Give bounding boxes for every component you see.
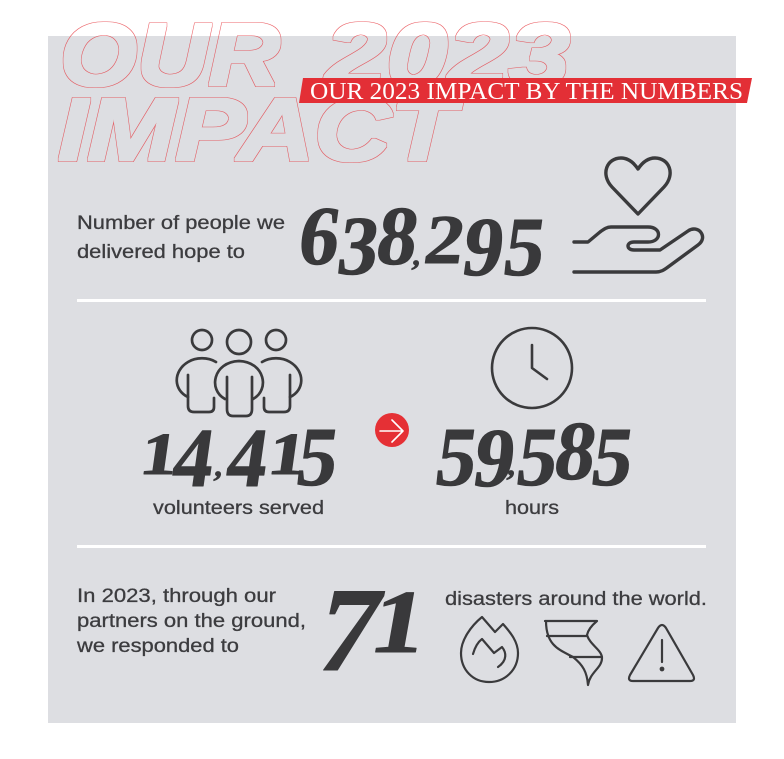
number: 14,415: , xyxy=(213,449,225,483)
text: disasters lead-in xyxy=(76,585,306,657)
icon: red arrow xyxy=(375,413,409,447)
text: disasters lead-in: we responded to xyxy=(76,635,239,657)
number: 638,295: 2 xyxy=(420,201,470,279)
text: disasters around the world: disasters around the world. xyxy=(445,588,707,610)
text: volunteers served: volunteers served xyxy=(153,497,324,519)
icon: flame xyxy=(461,617,518,682)
number: 59,585: 8 xyxy=(549,405,602,497)
number: 59,585 xyxy=(430,405,639,504)
number: 638,295 xyxy=(293,190,551,293)
number: 71: 1 xyxy=(364,572,435,672)
number: 14,415: 5 xyxy=(291,411,344,503)
number: 59,585: 5 xyxy=(430,411,483,503)
text: people description xyxy=(77,212,285,263)
panel: grey background xyxy=(48,36,736,723)
divider xyxy=(77,545,706,548)
text: disasters lead-in: In 2023, through our xyxy=(77,585,277,607)
text: hours: hours xyxy=(505,497,559,519)
number: 59,585: 5 xyxy=(511,411,564,503)
number: 14,415: 1 xyxy=(136,420,183,487)
title: outlined OUR 2023 IMPACT: 2023 xyxy=(322,5,570,104)
icon: clock xyxy=(492,328,572,408)
number: 638,295: 3 xyxy=(332,200,385,292)
number: 638,295: 9 xyxy=(457,201,510,293)
heading banner: OUR 2023 IMPACT BY THE NUMBERS xyxy=(310,78,743,105)
number: 14,415: 1 xyxy=(264,420,311,487)
text: disasters lead-in: partners on the ground, xyxy=(77,610,306,632)
divider xyxy=(77,299,706,302)
number: 59,585: , xyxy=(506,448,518,482)
number: 71: 7 xyxy=(305,564,393,697)
number: 14,415: 4 xyxy=(167,412,220,504)
number: 59,585: 5 xyxy=(586,411,639,503)
title: outlined OUR 2023 IMPACT xyxy=(58,5,570,179)
number: 14,415 xyxy=(136,411,344,504)
number: 638,295: 6 xyxy=(293,190,346,282)
number: 71 xyxy=(305,564,435,697)
number: 638,295: 8 xyxy=(371,190,424,282)
icon: heart in hand xyxy=(574,158,703,272)
title: outlined OUR 2023 IMPACT: IMPACT xyxy=(58,80,462,179)
number: 59,585: 9 xyxy=(468,412,521,504)
number: 638,295: 5 xyxy=(498,201,551,293)
number: 638,295: , xyxy=(411,238,423,272)
number: 14,415: 4 xyxy=(221,412,274,504)
icon: tornado xyxy=(545,621,602,685)
text: people description: Number of people we xyxy=(77,212,285,234)
title: outlined OUR 2023 IMPACT: OUR xyxy=(60,5,280,104)
text: people description: delivered hope to xyxy=(77,241,245,263)
icon: warning triangle xyxy=(629,625,694,681)
icon: three volunteers xyxy=(177,330,301,416)
